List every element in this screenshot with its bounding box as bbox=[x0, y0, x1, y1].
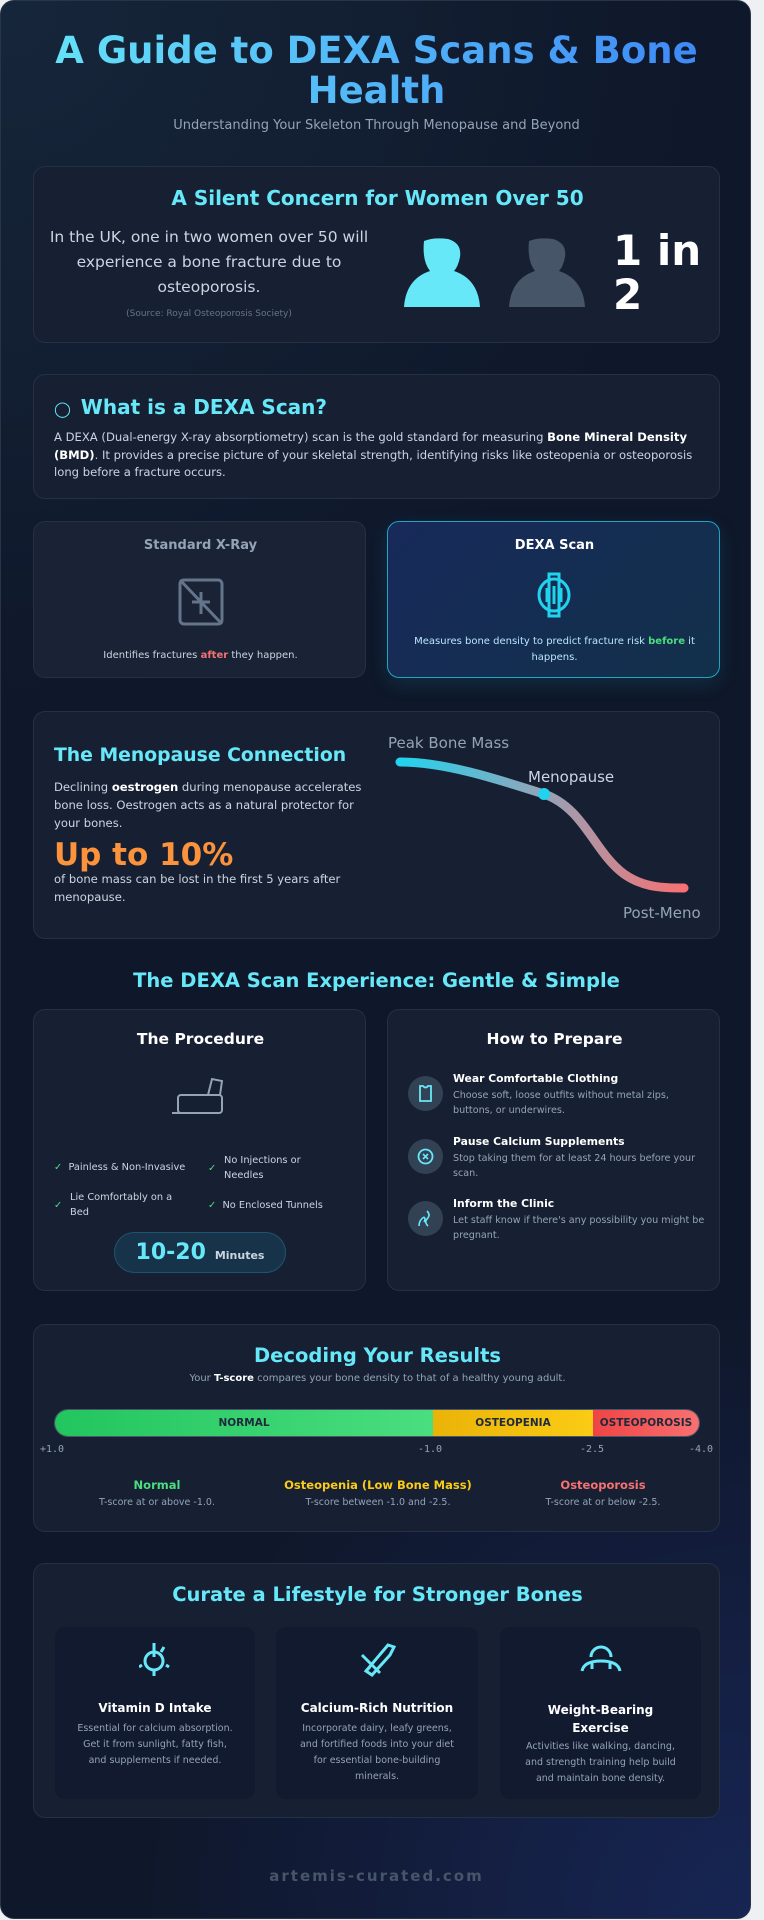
panel: standard x-ray bbox=[33, 521, 366, 678]
stat caption: of bone mass can be lost in the first 5 years after menopause. bbox=[54, 872, 340, 904]
card: vitamin D bbox=[55, 1627, 255, 1799]
checklist: Needles bbox=[224, 1170, 263, 1181]
legend: osteopenia: T-score between -1.0 and -2.5. bbox=[305, 1497, 450, 1508]
footer: artemis-curated.com bbox=[269, 1867, 484, 1885]
legend: normal: T-score at or above -1.0. bbox=[99, 1497, 215, 1508]
legend: osteoporosis: T-score at or below -2.5. bbox=[546, 1497, 660, 1508]
checklist: ✓ No Enclosed Tunnels bbox=[208, 1200, 323, 1211]
subtitle: Understanding Your Skeleton Through Menopause and Beyond bbox=[173, 118, 580, 133]
panel: menopause connection bbox=[33, 711, 720, 939]
legend: osteoporosis bbox=[545, 1478, 660, 1508]
panel: how to prepare bbox=[387, 1009, 720, 1291]
icon: sun bbox=[139, 1643, 170, 1676]
bar chart: t-score scale: OSTEOPENIA bbox=[475, 1417, 551, 1429]
icon: food bbox=[361, 1643, 396, 1677]
card: exercise: Weight-Bearing bbox=[548, 1703, 653, 1717]
icon: pregnancy bbox=[408, 1201, 443, 1236]
panel: DEXA scan bbox=[387, 521, 720, 678]
item: inform clinic: Let staff know if there's any possibility you might be pregnant. bbox=[453, 1215, 704, 1241]
item: clothing bbox=[408, 1072, 669, 1116]
source: (Source: Royal Osteoporosis Society) bbox=[126, 309, 292, 319]
stat: 1 in 2: 1 in bbox=[613, 226, 701, 275]
heading: A Silent Concern for Women Over 50 bbox=[171, 186, 584, 210]
heading: The Menopause Connection bbox=[54, 745, 346, 766]
chart: bone mass curve bbox=[388, 734, 702, 922]
legend: osteopenia bbox=[284, 1478, 472, 1508]
text: Identifies fractures after they happen. bbox=[103, 650, 298, 661]
scale labels: -1.0 bbox=[418, 1444, 442, 1455]
item: clothing: Choose soft, loose outfits without metal zips, buttons, or underwires. bbox=[453, 1090, 669, 1116]
checklist bbox=[54, 1155, 323, 1218]
text block: In the UK, one in two women over 50 will experience a bone fracture due to osteoporosis. bbox=[50, 228, 368, 296]
card: calcium: Calcium-Rich Nutrition bbox=[301, 1701, 453, 1715]
scale labels: -2.5 bbox=[580, 1444, 604, 1455]
bar chart: t-score scale bbox=[54, 1409, 700, 1437]
text block: Declining oestrogen during menopause accelerates bone loss. Oestrogen acts as a natural protector for your bones. bbox=[54, 780, 361, 830]
legend: osteoporosis: Osteoporosis bbox=[560, 1478, 646, 1492]
section heading: experience: The DEXA Scan Experience: Gentle & Simple bbox=[133, 969, 620, 992]
checklist: ✓ Painless & Non-Invasive bbox=[54, 1162, 185, 1173]
panel: decoding results bbox=[33, 1324, 720, 1532]
item: inform clinic bbox=[408, 1197, 704, 1241]
checklist: Bed bbox=[70, 1207, 89, 1218]
title bbox=[1, 31, 752, 111]
heading: Curate a Lifestyle for Stronger Bones bbox=[172, 1583, 583, 1606]
stat: 1 in 2: 2 bbox=[613, 270, 642, 319]
legend: normal: Normal bbox=[134, 1478, 180, 1492]
item: inform clinic: Inform the Clinic bbox=[453, 1197, 554, 1210]
heading: The Procedure bbox=[137, 1030, 264, 1048]
title: Health bbox=[308, 69, 445, 112]
heading: Decoding Your Results bbox=[254, 1344, 501, 1367]
text: Measures bone density to predict fracture risk before it happens. bbox=[414, 636, 695, 663]
card: vitamin D: Vitamin D Intake bbox=[98, 1701, 212, 1715]
stat: 1 in 2 bbox=[613, 226, 701, 319]
checklist: ✓ bbox=[208, 1163, 216, 1174]
legend: normal bbox=[98, 1478, 215, 1508]
checklist: No Injections or bbox=[224, 1155, 301, 1166]
card: exercise: Exercise bbox=[572, 1721, 629, 1735]
panel: procedure bbox=[33, 1009, 366, 1291]
scale labels: +1.0 bbox=[40, 1444, 64, 1455]
chart: bone mass curve: Menopause bbox=[528, 768, 614, 786]
item: supplements bbox=[408, 1135, 696, 1179]
checklist: Lie Comfortably on a bbox=[70, 1192, 172, 1203]
subtitle: Your T-score compares your bone density to that of a healthy young adult. bbox=[189, 1373, 566, 1384]
scale labels: -4.0 bbox=[689, 1444, 713, 1455]
card: exercise bbox=[500, 1627, 701, 1799]
icon: person highlighted bbox=[404, 238, 480, 307]
panel: silent concern bbox=[33, 166, 720, 343]
card: calcium bbox=[276, 1627, 478, 1799]
checklist: ✓ bbox=[54, 1200, 62, 1211]
stat: up to 10%: Up to 10% bbox=[54, 837, 233, 873]
heading: ◯ What is a DEXA Scan? bbox=[54, 395, 327, 419]
bar chart: t-score scale: OSTEOPOROSIS bbox=[600, 1417, 692, 1429]
chart: bone mass curve: Peak Bone Mass bbox=[388, 734, 509, 752]
icon: scanner bbox=[538, 572, 570, 618]
card: calcium: Incorporate dairy, leafy greens, and fortified foods into your diet for essential bone-building minerals. bbox=[300, 1723, 454, 1782]
bar chart: t-score scale: NORMAL bbox=[218, 1417, 270, 1429]
text block: A DEXA (Dual-energy X-ray absorptiometry) scan is the gold standard for measuring Bone Mineral Density (BMD). It provides a precise picture of your skeletal strength, identifying risks like osteopenia or osteoporosis long before a fracture occurs. bbox=[54, 430, 692, 479]
pill: duration bbox=[114, 1232, 286, 1273]
icon: cancel bbox=[408, 1139, 443, 1174]
card: exercise: Activities like walking, dancing, and strength training help build and maintain bone density. bbox=[525, 1741, 676, 1784]
item: clothing: Wear Comfortable Clothing bbox=[453, 1072, 618, 1085]
item: supplements: Stop taking them for at least 24 hours before your scan. bbox=[453, 1153, 695, 1179]
item: supplements: Pause Calcium Supplements bbox=[453, 1135, 625, 1148]
heading: DEXA Scan bbox=[515, 538, 594, 553]
panel: lifestyle bbox=[33, 1563, 720, 1818]
icon: person grey bbox=[509, 238, 585, 307]
pill: duration: 10-20 Minutes bbox=[136, 1240, 264, 1265]
icon: x-ray crossed bbox=[178, 578, 224, 626]
icon: scanner bed bbox=[172, 1078, 224, 1114]
heading: Standard X-Ray bbox=[144, 538, 257, 553]
title: A Guide to DEXA Scans & Bone bbox=[55, 29, 698, 72]
scale labels bbox=[40, 1444, 713, 1455]
heading: How to Prepare bbox=[486, 1030, 623, 1048]
card: vitamin D: Essential for calcium absorption. Get it from sunlight, fatty fish, and supplements if needed. bbox=[77, 1723, 233, 1766]
icon: shirt bbox=[408, 1076, 443, 1111]
panel: what is a DEXA scan bbox=[33, 374, 720, 499]
legend: osteopenia: Osteopenia (Low Bone Mass) bbox=[284, 1478, 472, 1492]
icon: figure bbox=[580, 1646, 622, 1672]
